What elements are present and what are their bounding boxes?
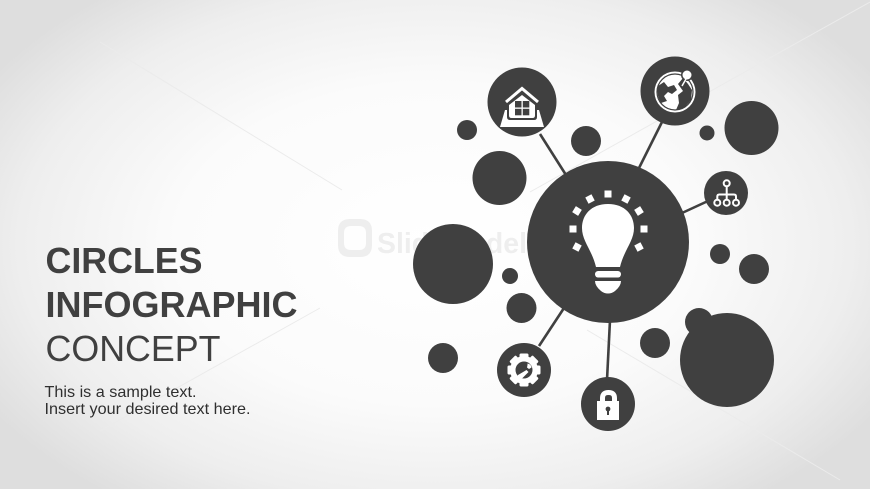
icon: network: [704, 171, 748, 215]
connector lines: [539, 122, 708, 380]
title: INFOGRAPHIC: [46, 284, 298, 325]
icon: padlock: [581, 377, 635, 431]
central circle with light bulb: [527, 161, 689, 323]
body text: [44, 384, 250, 418]
title: [46, 240, 298, 369]
body text: This is a sample text.: [44, 384, 196, 401]
watermark: SlideModel: [377, 228, 527, 260]
decorative circles: [413, 101, 778, 407]
title: CIRCLES: [46, 240, 202, 281]
body text: Insert your desired text here.: [44, 401, 250, 418]
icon: light bulb: [570, 190, 648, 294]
title: CONCEPT: [46, 328, 221, 369]
watermark: [338, 219, 527, 260]
icon: gear with wrench: [497, 343, 551, 397]
icon: house: [488, 68, 556, 136]
icon: globe: [640, 56, 710, 126]
